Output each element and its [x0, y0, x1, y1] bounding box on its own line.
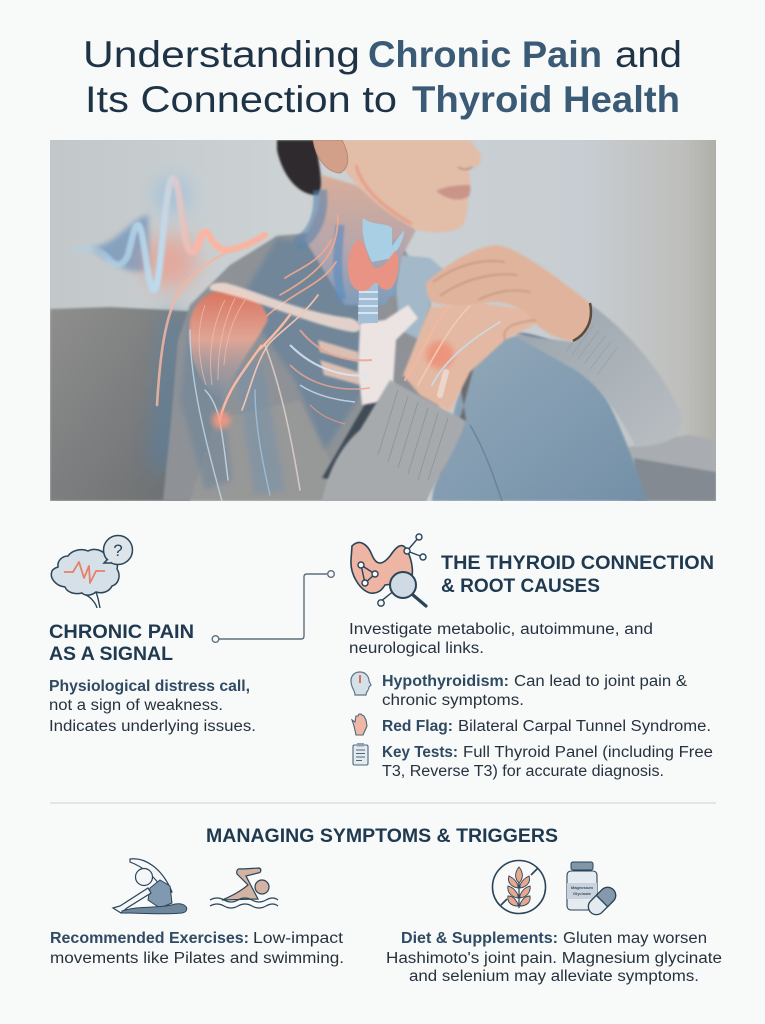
hero illustration: woman with thyroid and nerve overlay: [50, 140, 716, 501]
hypothyroidism item: Can lead to joint pain &: [514, 673, 688, 690]
heading: chronic pain as a signal: AS A SIGNAL: [49, 644, 173, 665]
icon: pilates stretch: [113, 859, 187, 914]
title: Thyroid Health: [412, 79, 680, 120]
ear: [313, 140, 348, 173]
title: Understanding: [83, 34, 360, 75]
blue glow around shoulder: [150, 310, 185, 470]
key tests item: Full Thyroid Panel (including Free: [463, 744, 713, 761]
hair: [277, 140, 321, 195]
icon: brain with question bubble: [51, 536, 133, 608]
text block: diet and supplements: Diet & Supplements:: [401, 930, 558, 947]
text block: diet and supplements: and selenium may alleviate symptoms.: [409, 968, 699, 985]
key tests item: Key Tests:: [382, 744, 458, 761]
hypothyroidism item: Hypothyroidism:: [382, 673, 509, 690]
title: Its Connection to: [85, 79, 397, 120]
collar: [396, 255, 444, 340]
dark gap beside the forearm: [440, 368, 474, 475]
shoulder muscle: [189, 290, 268, 400]
red flag item: Red Flag:: [382, 718, 453, 735]
text block: chronic pain description: Indicates underlying issues.: [49, 718, 256, 735]
text block: recommended exercises: Low-impact: [253, 930, 344, 947]
thyroid cartilage: [363, 218, 404, 262]
text block: chronic pain description: [49, 678, 256, 735]
icon: hand: [352, 714, 367, 735]
key tests item: [382, 744, 713, 780]
hypothyroidism item: [382, 673, 688, 709]
hypothyroidism item: chronic symptoms.: [382, 692, 524, 709]
heading: managing symptoms and triggers: MANAGING SYMPTOMS & TRIGGERS: [206, 826, 558, 847]
key tests item: T3, Reverse T3) for accurate diagnosis.: [382, 763, 664, 780]
icon: head: [351, 672, 371, 695]
text block: diet and supplements: Hashimoto's joint pain. Magnesium glycinate: [386, 950, 722, 967]
title: and: [615, 34, 682, 75]
blue anatomy shading on torso: [180, 238, 368, 495]
icon: swimmer: [210, 868, 278, 908]
icon: brain with question bubble: ?: [113, 541, 123, 560]
text block: investigate links: Investigate metabolic, autoimmune, and: [349, 621, 653, 638]
wrist nerves: [405, 306, 500, 395]
icon: no gluten wheat: [492, 860, 546, 914]
heading: thyroid connection: [441, 553, 714, 597]
dark strip under the arm: [322, 402, 378, 480]
icon: supplement bottle and capsule: [567, 862, 619, 918]
clavicle: [210, 283, 361, 332]
icon: supplement bottle and capsule: Glycinate: [573, 891, 592, 896]
right sleeve: [513, 304, 682, 447]
red flag item: Bilateral Carpal Tunnel Syndrome.: [458, 718, 711, 735]
sofa right: [620, 435, 716, 501]
face: [335, 140, 481, 232]
icon: clipboard: [353, 743, 368, 765]
nerve branches: [190, 295, 318, 501]
text block: diet and supplements: Gluten may worsen: [563, 930, 707, 947]
icon: thyroid with magnifier and network nodes: [351, 534, 426, 606]
trachea: [358, 283, 378, 323]
heading: thyroid connection: & ROOT CAUSES: [441, 576, 600, 597]
torso and sweater: [163, 232, 440, 501]
neck orange nerves: [262, 215, 338, 320]
text block: recommended exercises: Recommended Exercises:: [50, 930, 249, 947]
text block: recommended exercises: [50, 930, 344, 967]
hands: [403, 245, 591, 412]
left cuff and forearm: [322, 380, 466, 501]
title: Chronic Pain: [368, 34, 602, 75]
text block: diet and supplements: [386, 930, 722, 985]
neck nerves and vessels: [296, 190, 398, 300]
text block: chronic pain description: Physiological distress call,: [49, 678, 250, 695]
sternum and ribs: [318, 305, 418, 405]
text block: investigate links: neurological links.: [349, 640, 484, 657]
icon: supplement bottle and capsule: Magnesium: [571, 885, 593, 890]
rib lines: [290, 330, 372, 424]
raised leg: [432, 336, 647, 501]
pain signal wave: [73, 178, 265, 405]
connector line: [212, 571, 334, 642]
nerve glow at arm: [212, 411, 230, 429]
thyroid gland: [348, 240, 398, 291]
text block: investigate links: [349, 621, 653, 657]
title: [83, 34, 682, 120]
heading: chronic pain as a signal: [49, 622, 194, 665]
text block: chronic pain description: not a sign of weakness.: [49, 697, 223, 714]
cuff of right sleeve edge: [573, 303, 591, 341]
heading: chronic pain as a signal: CHRONIC PAIN: [49, 622, 194, 643]
heading: thyroid connection: THE THYROID CONNECTION: [441, 553, 714, 574]
neck: [305, 175, 416, 305]
leg fold: [470, 425, 502, 501]
text block: recommended exercises: movements like Pilates and swimming.: [50, 950, 344, 967]
sofa back left: [50, 307, 200, 501]
